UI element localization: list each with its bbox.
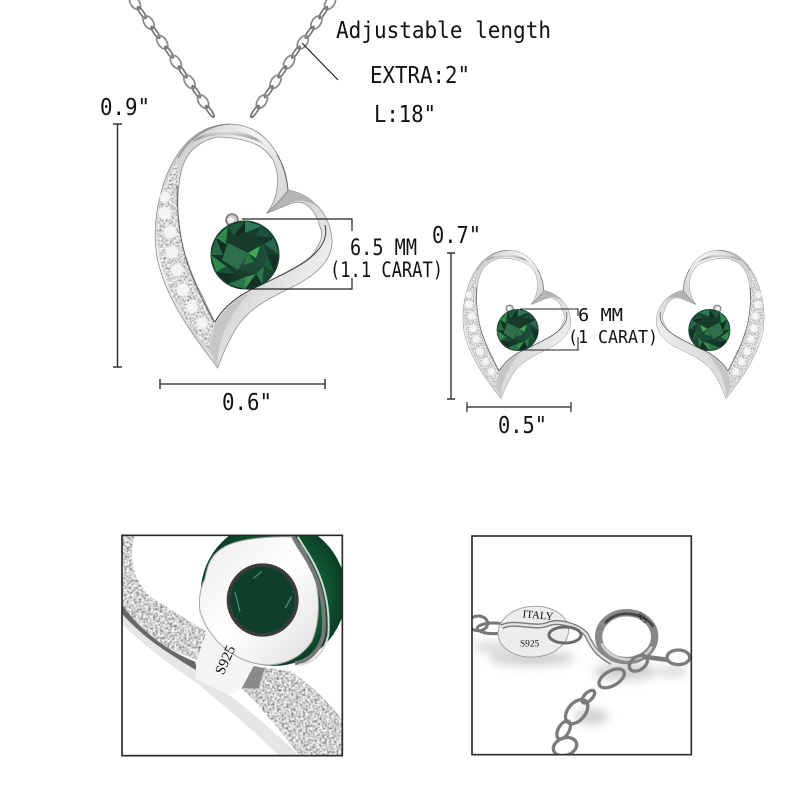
earring gem size callout: (1 CARAT): [568, 327, 658, 348]
left earring: [463, 250, 571, 399]
necklace gem size callout: 6.5 MM: [350, 236, 417, 261]
adjustable length callout: L:18": [374, 102, 436, 128]
panel: chain clasp ITALY S925 photo: [469, 536, 691, 759]
earring width dimension: [467, 402, 571, 439]
necklace height dimension: [100, 95, 150, 367]
ITALY S925 tag: [498, 606, 570, 658]
panel: chain clasp ITALY S925 photo: S925: [520, 640, 540, 650]
earring gem size callout: [518, 305, 658, 350]
necklace width dimension: [160, 379, 325, 416]
earring height dimension: 0.7": [432, 223, 481, 249]
earring gem size callout: 6 MM: [578, 305, 623, 326]
panel: chain clasp ITALY S925 photo: ITALY: [522, 608, 554, 623]
panel: chain clasp ITALY S925 photo: 925: [635, 610, 650, 625]
adjustable length callout: [302, 18, 551, 128]
panel: back of pendant S925 stamp photo: [122, 521, 346, 758]
necklace gem size callout: [242, 219, 443, 289]
necklace height dimension: 0.9": [100, 95, 150, 121]
necklace heart pendant with green gem: [155, 124, 332, 368]
adjustable length callout: EXTRA:2": [370, 63, 470, 89]
S925 stamp: S925: [212, 643, 239, 677]
necklace width dimension: 0.6": [222, 390, 272, 416]
chain links right and lower: [551, 650, 690, 759]
necklace gem size callout: (1.1 CARAT): [330, 258, 443, 282]
soft shadows: [472, 643, 688, 725]
right earring: [656, 250, 764, 399]
earring height dimension: [432, 223, 481, 399]
green gem seen from behind: [200, 536, 342, 666]
chain links left: [472, 614, 501, 636]
necklace chain: right side: [247, 0, 338, 120]
necklace chain: left side: [127, 0, 218, 120]
earring width dimension: 0.5": [498, 413, 547, 439]
adjustable length callout: Adjustable length: [336, 18, 551, 44]
spring ring: [599, 613, 655, 661]
